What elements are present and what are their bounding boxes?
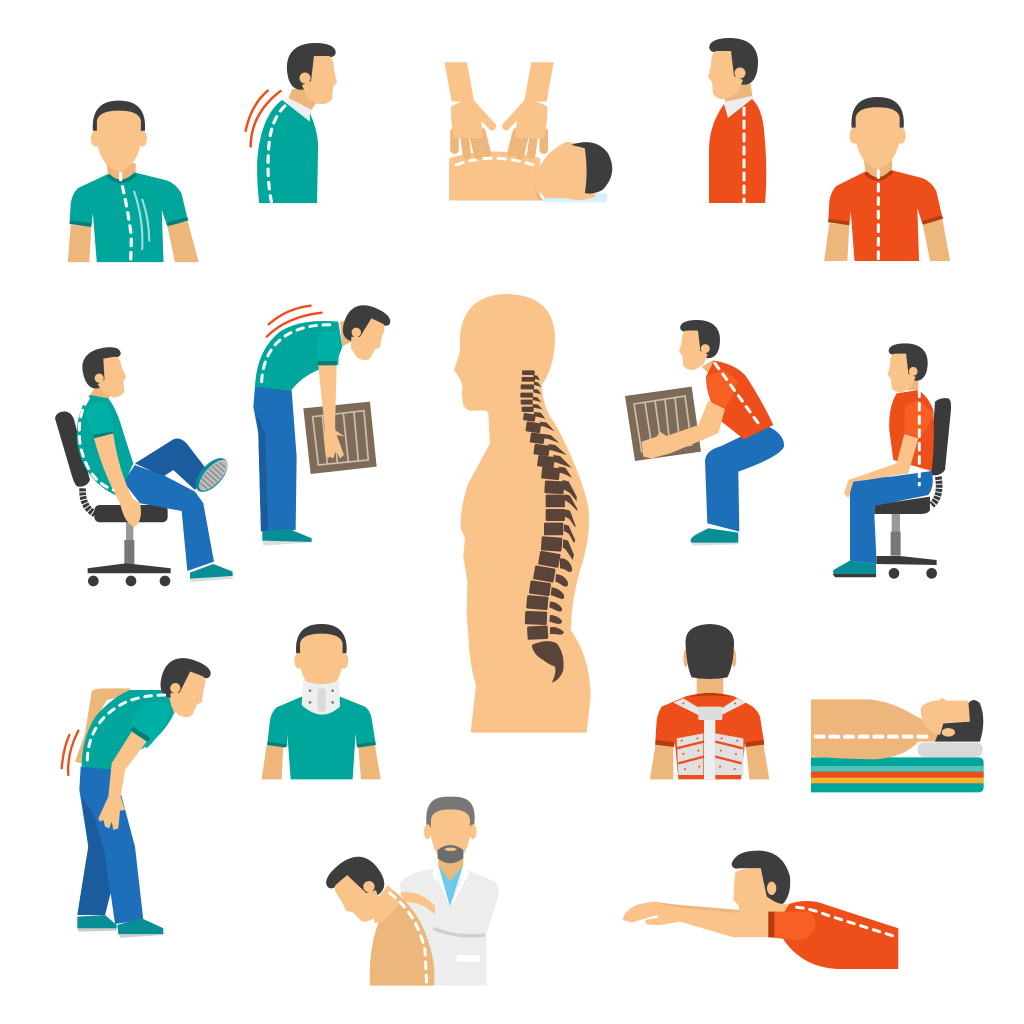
pants xyxy=(253,387,297,532)
raised leg xyxy=(135,439,208,490)
mattress xyxy=(811,757,984,792)
figure: straight posture orange side view xyxy=(708,38,766,203)
arms xyxy=(650,743,769,779)
chair spring xyxy=(83,488,95,514)
shirt xyxy=(709,99,766,203)
shirt xyxy=(889,390,934,471)
back of head xyxy=(685,624,734,679)
head of hunched figure xyxy=(287,43,337,104)
hands xyxy=(444,62,554,156)
coat lapels xyxy=(432,865,469,908)
patient head xyxy=(320,847,401,929)
sleeve xyxy=(706,370,738,408)
spine line xyxy=(816,731,927,743)
coat pocket xyxy=(457,955,480,962)
head xyxy=(151,652,215,721)
central figure with spine xyxy=(454,294,591,733)
sleeve xyxy=(768,912,815,940)
head xyxy=(708,38,758,99)
sleeve xyxy=(904,400,934,437)
patient body xyxy=(449,152,540,200)
sleeve cuff xyxy=(93,432,114,439)
arm shading xyxy=(653,902,739,913)
cuffs xyxy=(655,742,764,745)
face xyxy=(921,697,970,735)
pants xyxy=(850,471,933,564)
figure: neck brace xyxy=(262,624,381,779)
pants xyxy=(705,425,784,532)
neck xyxy=(702,360,713,375)
neck xyxy=(902,378,918,390)
torso xyxy=(782,901,898,969)
head and arm xyxy=(623,868,790,937)
pillow xyxy=(918,742,983,757)
figure: swimming stretch exercise xyxy=(623,851,898,969)
doctor beard xyxy=(438,845,463,863)
head xyxy=(79,345,129,402)
neck xyxy=(288,87,317,110)
figure: doctor examining patient xyxy=(320,797,499,986)
torso xyxy=(255,321,342,391)
body silhouette xyxy=(454,294,591,733)
hair xyxy=(935,700,983,742)
shoe sole xyxy=(190,452,233,497)
arm and hand xyxy=(94,433,141,527)
patient back xyxy=(370,887,435,986)
neck xyxy=(864,161,892,178)
collar xyxy=(282,98,312,122)
sleeve xyxy=(130,702,172,748)
spine line xyxy=(79,398,113,490)
collar and cuffs xyxy=(70,174,188,225)
neck xyxy=(90,385,113,400)
doctor hand xyxy=(400,892,435,914)
shoe xyxy=(833,561,876,577)
shirt xyxy=(82,690,174,769)
body xyxy=(811,699,942,759)
ears xyxy=(683,650,736,667)
head xyxy=(294,624,348,693)
patient neck xyxy=(370,885,400,923)
arm and hand xyxy=(98,732,147,830)
cuffs xyxy=(267,743,376,746)
sleeve xyxy=(85,402,114,438)
doctor neck xyxy=(438,850,463,883)
figure: correct sitting posture xyxy=(833,343,951,579)
arms xyxy=(262,745,381,779)
head xyxy=(333,298,394,365)
pain arcs xyxy=(246,91,281,147)
chair seat xyxy=(874,497,930,514)
chair base xyxy=(88,563,171,586)
pants shading xyxy=(77,797,110,915)
shoe xyxy=(262,529,312,546)
spine line xyxy=(874,171,883,260)
neck xyxy=(167,687,183,713)
shoe xyxy=(691,528,738,546)
shirt xyxy=(70,173,188,262)
chair seat xyxy=(94,505,168,522)
neck xyxy=(722,80,753,104)
pain arcs xyxy=(62,731,78,775)
patient neck shadow xyxy=(534,167,544,200)
collar xyxy=(688,693,733,697)
spine line xyxy=(915,390,924,485)
shoes xyxy=(77,915,163,938)
chair post xyxy=(124,522,134,564)
figure: lower back pain xyxy=(62,652,215,938)
spine line xyxy=(268,106,285,201)
cuff xyxy=(132,728,149,740)
torso xyxy=(77,395,133,497)
arms xyxy=(824,220,950,261)
collar and cuffs xyxy=(828,171,943,223)
back arm xyxy=(75,688,130,763)
spine line xyxy=(742,108,746,203)
figure: bad sitting posture on chair xyxy=(55,345,233,586)
arm and hand xyxy=(642,401,725,458)
neck xyxy=(106,163,136,180)
patient head xyxy=(537,142,596,200)
shirt xyxy=(267,697,376,779)
pain arcs xyxy=(267,306,322,337)
figure: lying on orthopedic mattress xyxy=(811,697,984,792)
spine line xyxy=(390,893,427,983)
scoliotic spine xyxy=(121,173,131,261)
neck xyxy=(697,675,723,695)
spine line xyxy=(797,907,893,936)
figure: front view orange shirt xyxy=(824,97,950,261)
doctor coat xyxy=(400,868,499,986)
pillow xyxy=(544,193,607,202)
arm and hand xyxy=(318,365,345,458)
pants shading xyxy=(257,413,268,531)
doctor head xyxy=(424,797,477,863)
arms xyxy=(68,221,199,262)
foot on floor xyxy=(190,564,233,582)
chair back xyxy=(930,398,951,475)
chair back xyxy=(55,412,90,487)
box xyxy=(625,387,701,461)
muscle lines xyxy=(134,191,149,250)
head xyxy=(679,320,720,370)
head xyxy=(850,97,906,169)
shirt xyxy=(706,361,773,439)
shirt xyxy=(828,170,943,261)
head xyxy=(888,343,928,392)
neck xyxy=(340,320,360,347)
figure: back brace xyxy=(650,624,769,779)
figure: front view scoliosis teal shirt xyxy=(68,101,199,262)
shirt xyxy=(655,693,764,779)
pants xyxy=(77,767,143,924)
ear xyxy=(767,882,776,895)
box xyxy=(303,402,377,474)
sweater xyxy=(257,100,318,203)
figure: bending wrongly to lift box xyxy=(253,298,394,546)
spine line xyxy=(456,158,533,165)
figure: correct lifting squat xyxy=(625,320,784,546)
sleeve xyxy=(317,331,340,365)
spine line xyxy=(715,363,758,423)
coat sleeve fold xyxy=(433,928,485,936)
spine line xyxy=(262,325,335,382)
doctor shirt xyxy=(438,865,463,907)
neck brace xyxy=(302,680,340,715)
chair post xyxy=(891,514,901,556)
figure: massage treatment xyxy=(444,62,612,202)
cuff xyxy=(768,912,774,937)
lower leg xyxy=(123,465,214,571)
cuff xyxy=(318,361,337,365)
spine line xyxy=(87,695,167,760)
spine vertebrae xyxy=(520,370,577,683)
patient hair xyxy=(571,142,612,194)
collar xyxy=(724,96,753,118)
ear xyxy=(942,728,955,737)
figure: hunched posture with sweater xyxy=(246,87,318,203)
chair base xyxy=(877,556,937,579)
arm and hand xyxy=(844,434,918,498)
hair xyxy=(732,851,790,905)
brace xyxy=(673,698,746,779)
chair spring xyxy=(932,477,939,505)
head xyxy=(91,101,147,172)
